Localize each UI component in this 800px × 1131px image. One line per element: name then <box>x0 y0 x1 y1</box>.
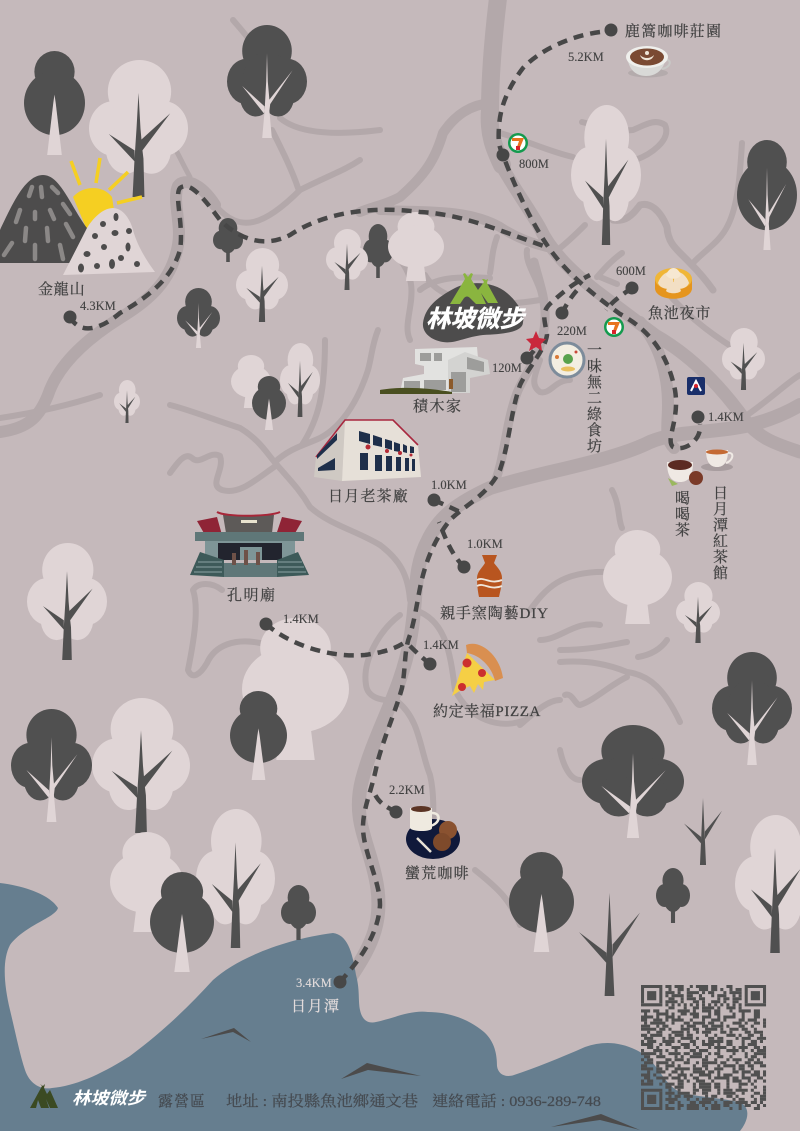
tree: dark 15 <box>656 868 690 923</box>
tree: dark 1 <box>24 51 85 155</box>
icon: latte cup <box>626 46 670 78</box>
distance: 1.4KM tea house: 1.4KM <box>708 410 744 424</box>
footer: phone: 連絡電話 : 0936-289-748 <box>432 1093 601 1110</box>
icon: tea cups and cookie <box>667 450 733 486</box>
distance: 3.4KM: 3.4KM <box>296 976 332 990</box>
distance: 5.2KM: 5.2KM <box>568 50 604 64</box>
distance: 600M: 600M <box>616 264 646 278</box>
lake birds <box>201 1028 640 1130</box>
tree: dark 6 <box>363 224 393 278</box>
place name: block house: 積木家 <box>413 398 463 415</box>
logo: Lin Po Wei Bu <box>423 273 527 342</box>
tree: light 5 <box>280 343 320 417</box>
tree: light 1 <box>89 60 188 197</box>
vase stripes <box>477 579 502 588</box>
distance: 1.4KM temple: 1.4KM <box>283 612 319 626</box>
tree: dark 2 <box>227 25 307 138</box>
tree: pale 4 <box>242 618 349 760</box>
distance: 1.0KM tea factory: 1.0KM <box>431 478 467 492</box>
place name: pottery DIY: 親手窯陶藝DIY <box>440 604 549 622</box>
icon: coffee and cookies <box>406 806 460 859</box>
tree: light 9 <box>27 543 107 660</box>
place name: Kongming temple: 孔明廟 <box>227 586 277 604</box>
illustration: Confucius temple <box>190 512 309 577</box>
tree: light 7 <box>114 380 140 423</box>
tree: dark 11 <box>582 725 684 838</box>
tree: pale 2 <box>231 355 271 408</box>
tree: light 2 <box>571 105 641 245</box>
footer logo tent <box>30 1084 58 1108</box>
place name: Yuchi night market: 魚池夜市 <box>648 304 711 322</box>
footer logo text: 林坡微步 <box>72 1089 147 1108</box>
distance: 800M: 800M <box>519 157 549 171</box>
place name: Sun Moon Lake black tea house: 日月潭紅茶館 <box>711 485 728 581</box>
tree: dark 10 <box>712 652 792 765</box>
icon: 7-Eleven north <box>508 133 528 153</box>
place name: pizza: 約定幸福PIZZA <box>433 702 541 720</box>
distance: 4.3KM: 4.3KM <box>80 299 116 313</box>
illustration: Jinlong mountain with sun <box>0 158 155 275</box>
route stop markers <box>64 24 704 988</box>
tree: dark 4 <box>213 218 243 262</box>
icon: 7-Eleven south <box>604 317 624 337</box>
icon: pizza slice <box>452 644 503 696</box>
illustration: block house <box>380 347 490 394</box>
place name: Jinlong mountain: 金龍山 <box>38 281 85 298</box>
tree: pale 3 <box>603 530 672 624</box>
tree: light 10 <box>92 698 190 833</box>
logo: Lin Po Wei Bu: 林坡微步 <box>426 306 527 333</box>
tree: dark 9 <box>11 709 92 822</box>
icon: steamed dumplings <box>655 268 692 299</box>
icon: PX Mart <box>687 377 705 395</box>
place name: wild coffee: 蠻荒咖啡 <box>405 864 470 882</box>
tree: light 12 <box>735 815 800 953</box>
tree: pale 1 <box>388 212 444 281</box>
place name: drink tea: 喝喝茶 <box>673 490 690 538</box>
distance: 2.2KM: 2.2KM <box>389 783 425 797</box>
icon: camp location star <box>526 331 546 351</box>
tree: pale 5 <box>110 832 183 932</box>
tree: light 6 <box>722 328 765 390</box>
tree: light 4 <box>326 229 368 290</box>
tree: light 11 <box>196 809 275 948</box>
footer: camp area: 露營區 <box>158 1092 205 1110</box>
tree: dark 14 <box>509 852 574 952</box>
icon: pottery vase <box>477 555 502 597</box>
tree: light 8 <box>676 582 720 643</box>
QR code <box>641 987 766 1109</box>
place name: Sun Moon Lake: 日月潭 <box>291 998 341 1015</box>
distance: 1.4KM pizza: 1.4KM <box>423 638 459 652</box>
tree: dark 7 <box>252 376 286 430</box>
place name: old tea factory: 日月老茶廠 <box>328 487 409 505</box>
tree: dark 5 <box>177 288 220 348</box>
icon: healthy dish <box>550 343 584 377</box>
place name: Luxiao coffee manor: 鹿篙咖啡莊園 <box>625 22 722 40</box>
tree: dark 8 <box>230 691 287 780</box>
dashed route lines <box>70 32 700 982</box>
tree: bare 2 <box>579 893 640 996</box>
distance: 220M: 220M <box>557 324 587 338</box>
lake: Sun Moon Lake <box>0 883 747 1131</box>
place name: unique green restaurant: 一味無二綠食坊 <box>585 342 602 454</box>
tree: dark 12 <box>150 872 214 972</box>
illustration: old tea factory <box>314 420 421 481</box>
distance: 1.0KM pottery: 1.0KM <box>467 537 503 551</box>
tree: bare 1 <box>684 798 722 865</box>
footer: address: 地址 : 南投縣魚池鄉通文巷 <box>226 1092 418 1110</box>
tree: dark 3 <box>737 140 797 250</box>
distance: 120M: 120M <box>492 361 522 375</box>
tree: light 3 <box>236 248 288 322</box>
tree: dark 13 <box>281 885 316 940</box>
